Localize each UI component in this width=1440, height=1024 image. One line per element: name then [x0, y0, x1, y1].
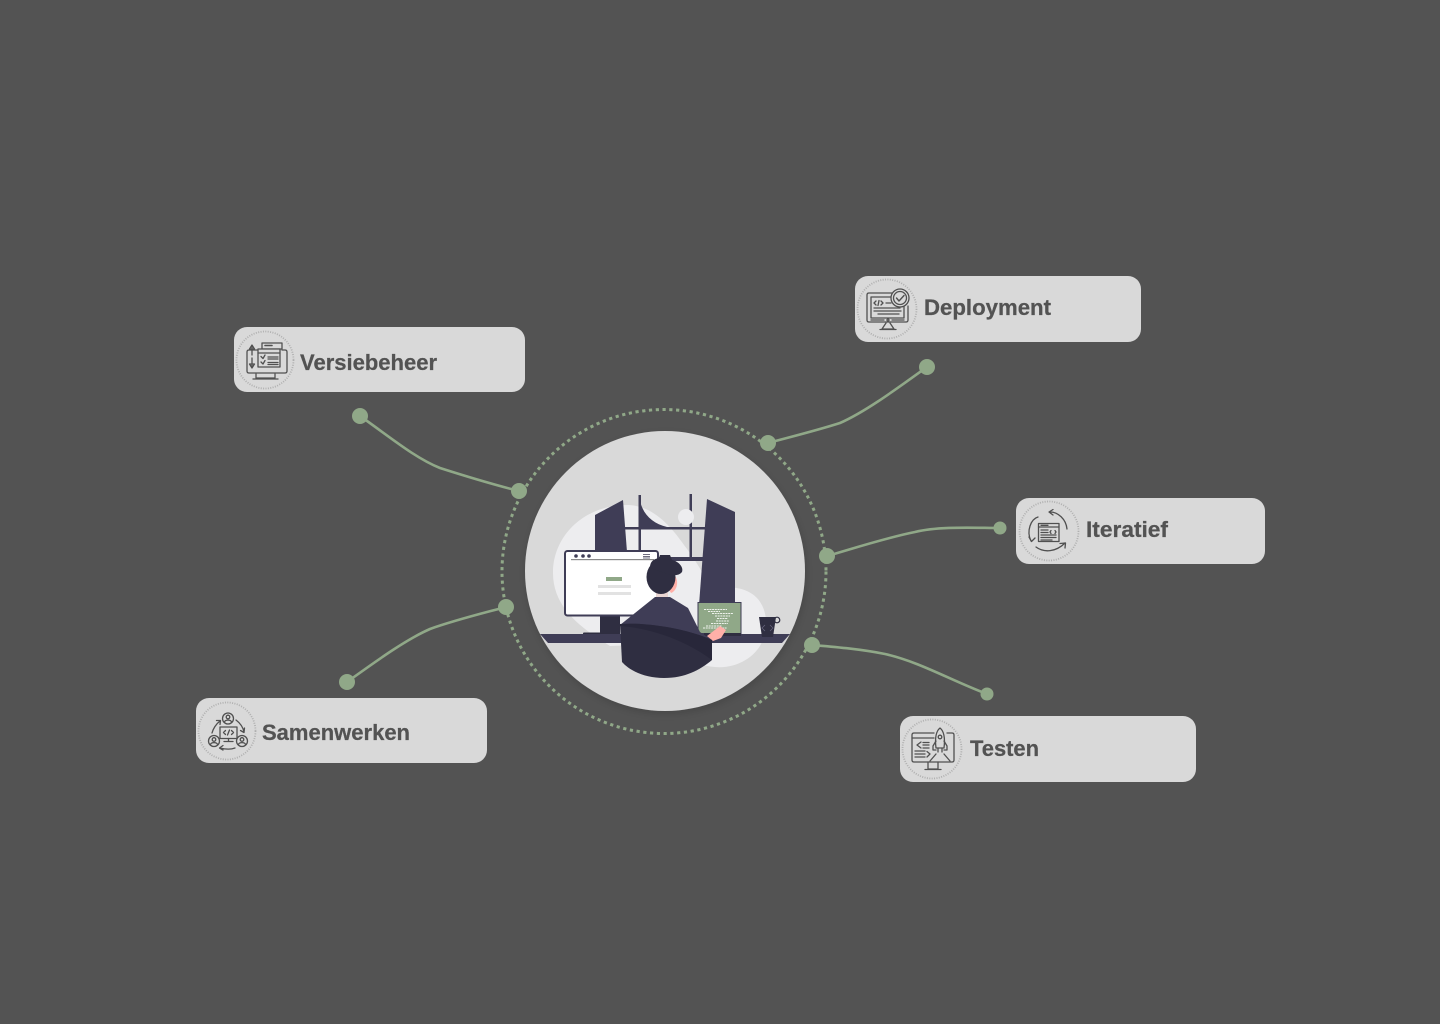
background blobs [553, 505, 766, 667]
connector: Samenwerken [339, 599, 514, 690]
icon: deployment [858, 280, 916, 338]
icon: iteration cycle [1020, 502, 1078, 560]
icon: collaboration [198, 702, 256, 760]
office chair [620, 624, 712, 678]
icon: version control [236, 332, 294, 388]
window frame and curtains [595, 494, 735, 605]
connector: Deployment [760, 359, 935, 451]
label: Testen: Testen [970, 736, 1039, 761]
coffee mug [759, 617, 780, 637]
moon [678, 509, 694, 525]
icon: rocket launch test [902, 720, 962, 778]
backdrop circle [525, 431, 805, 711]
connector: Testen [804, 637, 994, 700]
label: Deployment: Deployment [924, 295, 1052, 320]
desk [540, 634, 790, 643]
card: Iteratief [1016, 498, 1265, 564]
label: Versiebeheer: Versiebeheer [300, 350, 437, 375]
card: Samenwerken [196, 698, 487, 763]
central illustration: developer at desk [525, 431, 805, 711]
label: Iteratief: Iteratief [1086, 517, 1169, 542]
card: Testen [900, 716, 1196, 782]
dotted ring around the central illustration [502, 410, 826, 734]
card: Deployment [855, 276, 1141, 342]
card: Versiebeheer [234, 327, 525, 392]
label: Samenwerken: Samenwerken [262, 720, 410, 745]
laptop with code [698, 602, 741, 636]
computer monitor [565, 551, 658, 638]
connector: Versiebeheer [352, 408, 527, 499]
person seen from behind [620, 555, 726, 641]
connector: Iteratief [819, 522, 1006, 564]
